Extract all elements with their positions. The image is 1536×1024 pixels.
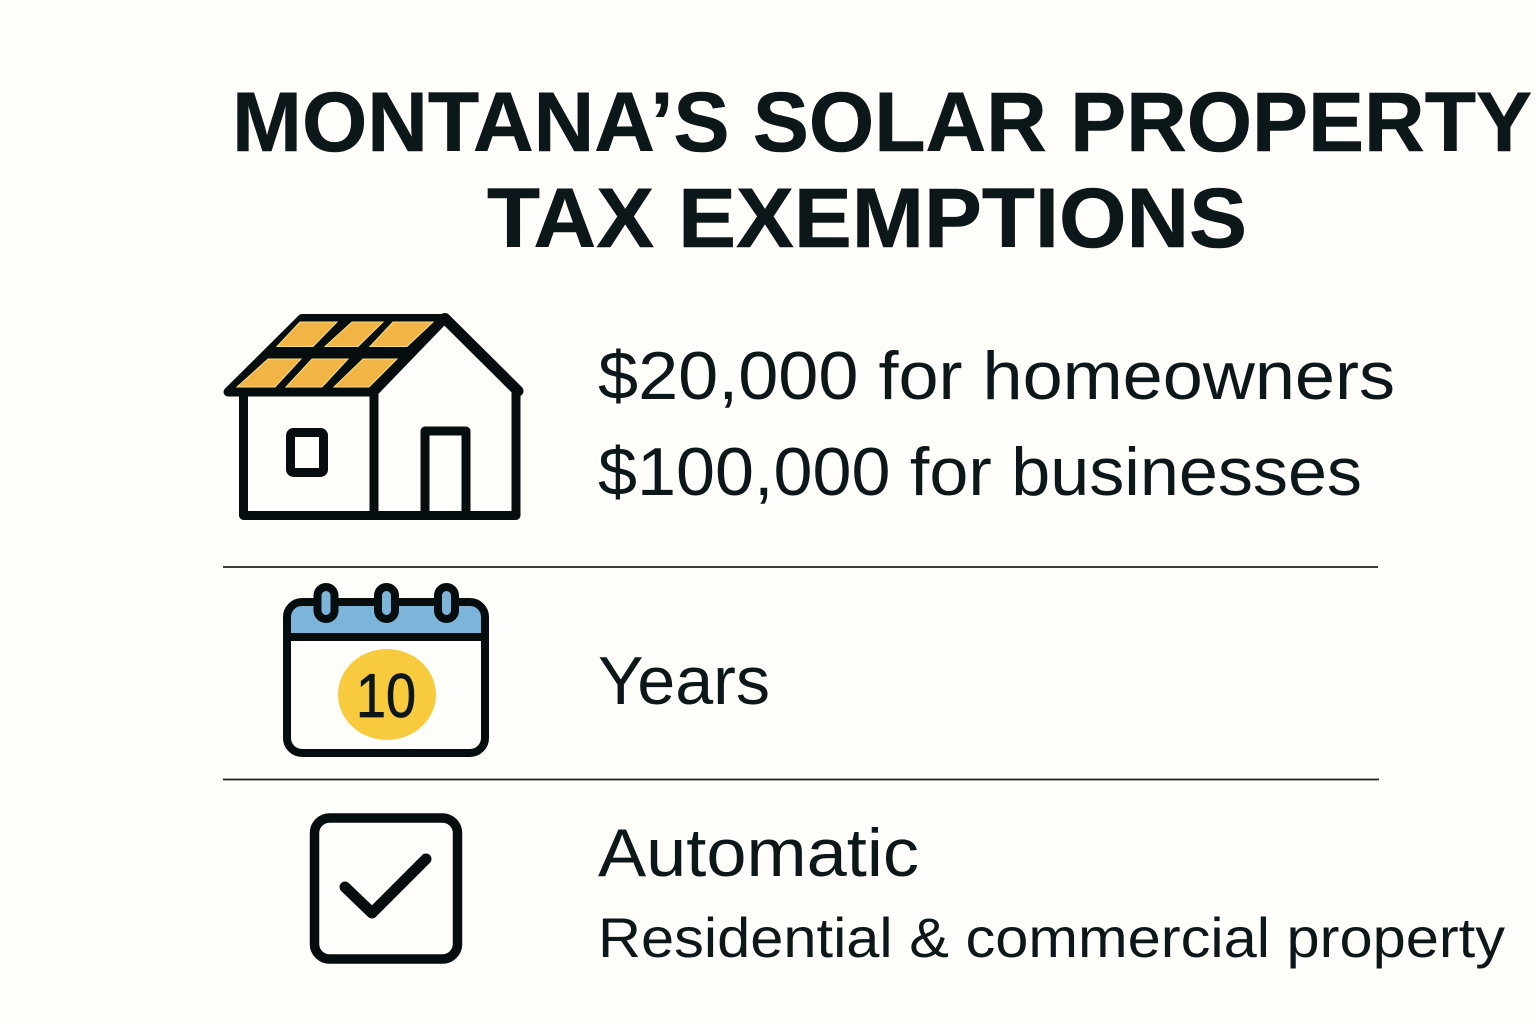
text: exemption amounts: $20,000 for homeowners	[598, 338, 1395, 414]
text: exemption amounts	[598, 338, 1395, 510]
icon: calendar with 10: 10	[356, 662, 416, 731]
title: MONTANA’S SOLAR PROPERTY	[232, 75, 1532, 169]
icon: house with solar panels	[228, 318, 518, 516]
title	[232, 75, 1532, 265]
text: duration: Years	[598, 643, 770, 719]
text: exemption amounts: $100,000 for businesses	[598, 434, 1362, 510]
icon: checkbox	[314, 818, 458, 959]
title: TAX EXEMPTIONS	[487, 171, 1247, 265]
icon: calendar with 10	[287, 587, 485, 753]
text: property types: Residential & commercial property	[598, 906, 1505, 969]
text: automatic application: Automatic	[598, 815, 919, 891]
